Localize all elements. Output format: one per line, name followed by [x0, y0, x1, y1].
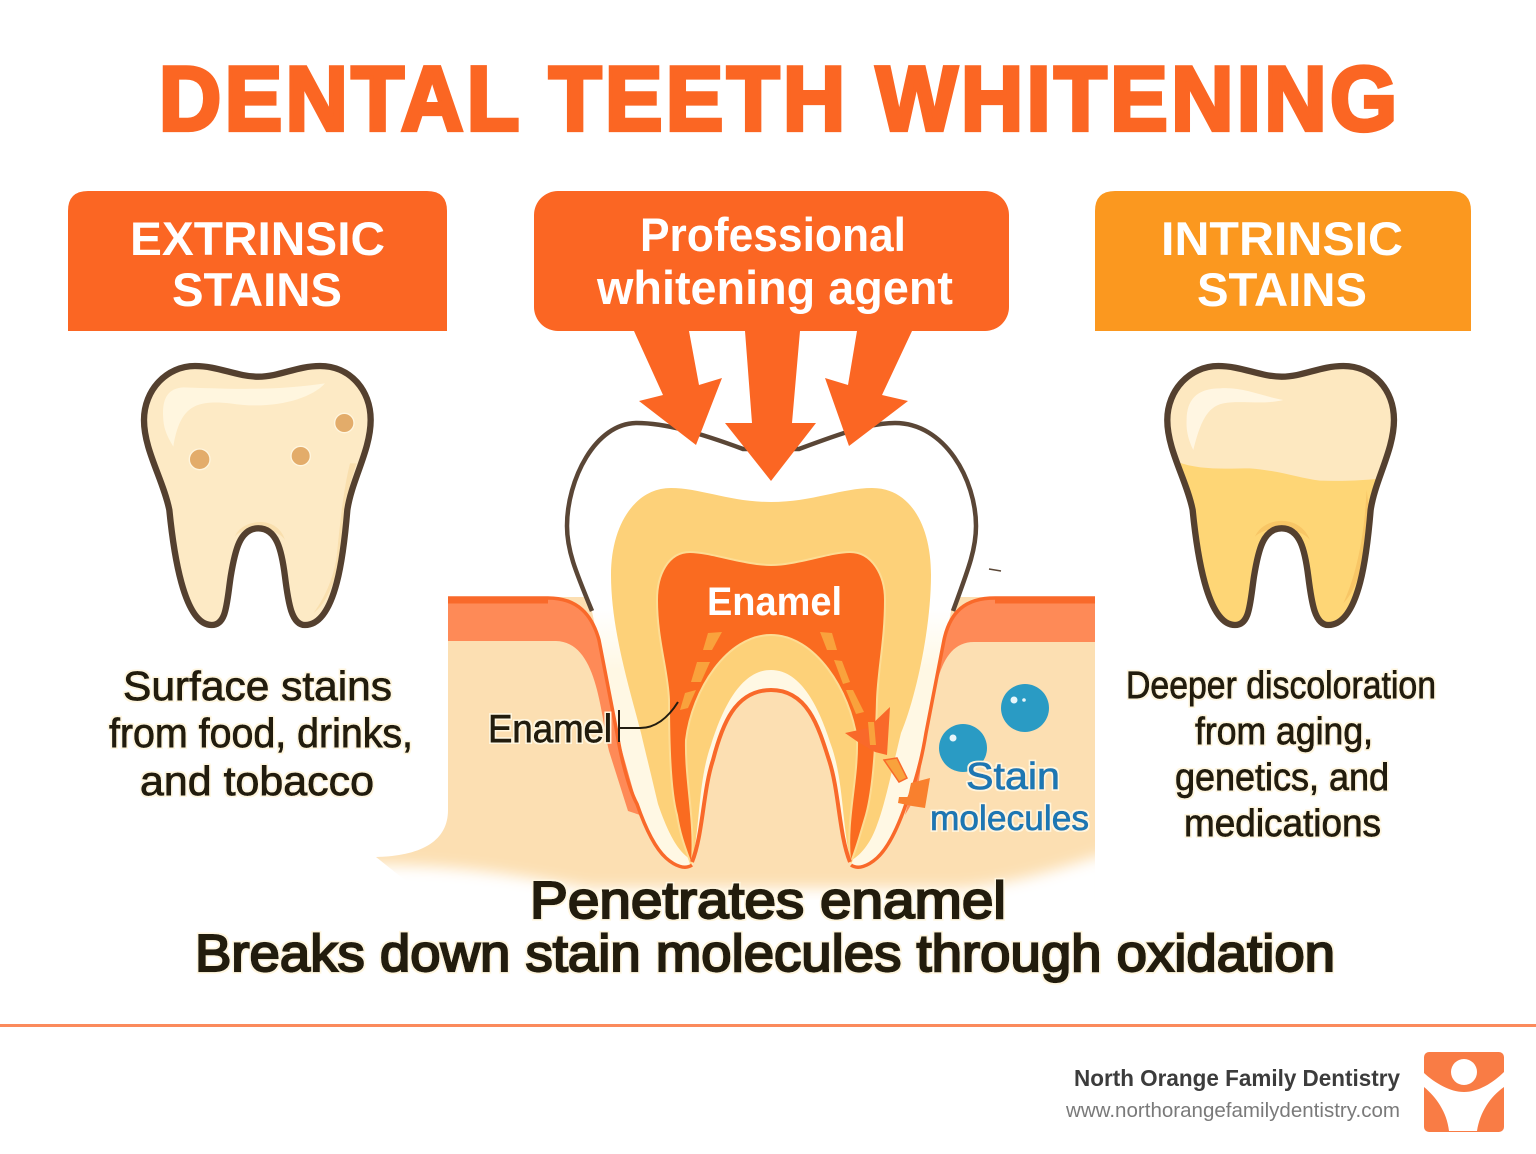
intrinsic heading — [1161, 212, 1403, 316]
caption — [195, 872, 1335, 983]
agent heading — [596, 208, 953, 314]
right gum — [905, 597, 1095, 815]
dentin layer — [611, 488, 931, 860]
extrinsic header box — [68, 191, 447, 331]
cream root layer left — [592, 610, 700, 867]
penetration dashes left — [680, 632, 722, 710]
intrinsic heading: STAINS — [1197, 263, 1367, 316]
label: enamel white: Enamel — [707, 580, 842, 624]
gum top bands — [448, 598, 1095, 604]
extrinsic description: from food, drinks, — [109, 710, 413, 756]
stain break-up marks — [845, 707, 930, 808]
gum tissue background — [376, 597, 1095, 900]
footer brand text — [1065, 1065, 1400, 1122]
stain molecule upper — [1001, 684, 1049, 732]
panel: extrinsic stains — [68, 191, 447, 804]
footer divider — [0, 1024, 1536, 1027]
gum and root outer line right — [851, 598, 1095, 867]
label: stain molecules — [930, 756, 1089, 838]
cream root layer right — [843, 610, 951, 867]
panel: central tooth cross-section — [340, 191, 1125, 930]
intrinsic description: medications — [1184, 803, 1381, 845]
agent heading: whitening agent — [596, 261, 953, 314]
small speck — [989, 569, 1001, 571]
root arch orange line — [692, 690, 850, 862]
caption: Breaks down stain molecules through oxidation — [195, 925, 1335, 983]
extrinsic description — [109, 663, 413, 804]
icon: tooth with surface stains — [144, 366, 371, 625]
stain molecule lower — [939, 724, 987, 772]
crown outline — [567, 423, 976, 611]
extrinsic heading — [130, 212, 385, 316]
root arch cream — [692, 670, 851, 861]
soft fade at gum base — [340, 852, 1110, 930]
extrinsic description: Surface stains — [123, 663, 392, 709]
intrinsic heading: INTRINSIC — [1161, 212, 1403, 265]
panel: intrinsic stains — [1095, 191, 1471, 845]
left gum — [448, 597, 640, 815]
caption: Penetrates enamel — [530, 872, 1006, 930]
agent arrows — [634, 331, 912, 481]
professional whitening agent box — [534, 191, 1009, 331]
extrinsic description: and tobacco — [140, 758, 374, 804]
agent heading: Professional — [640, 208, 906, 261]
right margin mask — [1095, 590, 1125, 910]
gum and root outer line left — [448, 598, 692, 867]
label: stain molecules: molecules — [930, 799, 1089, 838]
extrinsic heading: STAINS — [172, 263, 342, 316]
footer brand text: www.northorangefamilydentistry.com — [1065, 1099, 1400, 1122]
footer brand text: North Orange Family Dentistry — [1074, 1065, 1400, 1091]
label: enamel pointer: Enamel — [488, 708, 612, 751]
label: enamel pointer — [488, 702, 678, 751]
intrinsic header box — [1095, 191, 1471, 331]
title: DENTAL TEETH WHITENING — [159, 48, 1397, 150]
intrinsic description: genetics, and — [1175, 757, 1389, 799]
tooth crown and root silhouette — [567, 423, 976, 867]
penetration dashes right — [820, 632, 864, 714]
pulp chamber — [657, 552, 885, 864]
label: stain molecules: Stain — [966, 756, 1060, 798]
intrinsic description — [1126, 665, 1436, 845]
icon: tooth with deep discoloration — [1157, 357, 1407, 625]
intrinsic description: from aging, — [1195, 711, 1373, 753]
logo — [1424, 1052, 1504, 1132]
intrinsic description: Deeper discoloration — [1126, 665, 1436, 707]
extrinsic heading: EXTRINSIC — [130, 212, 385, 265]
